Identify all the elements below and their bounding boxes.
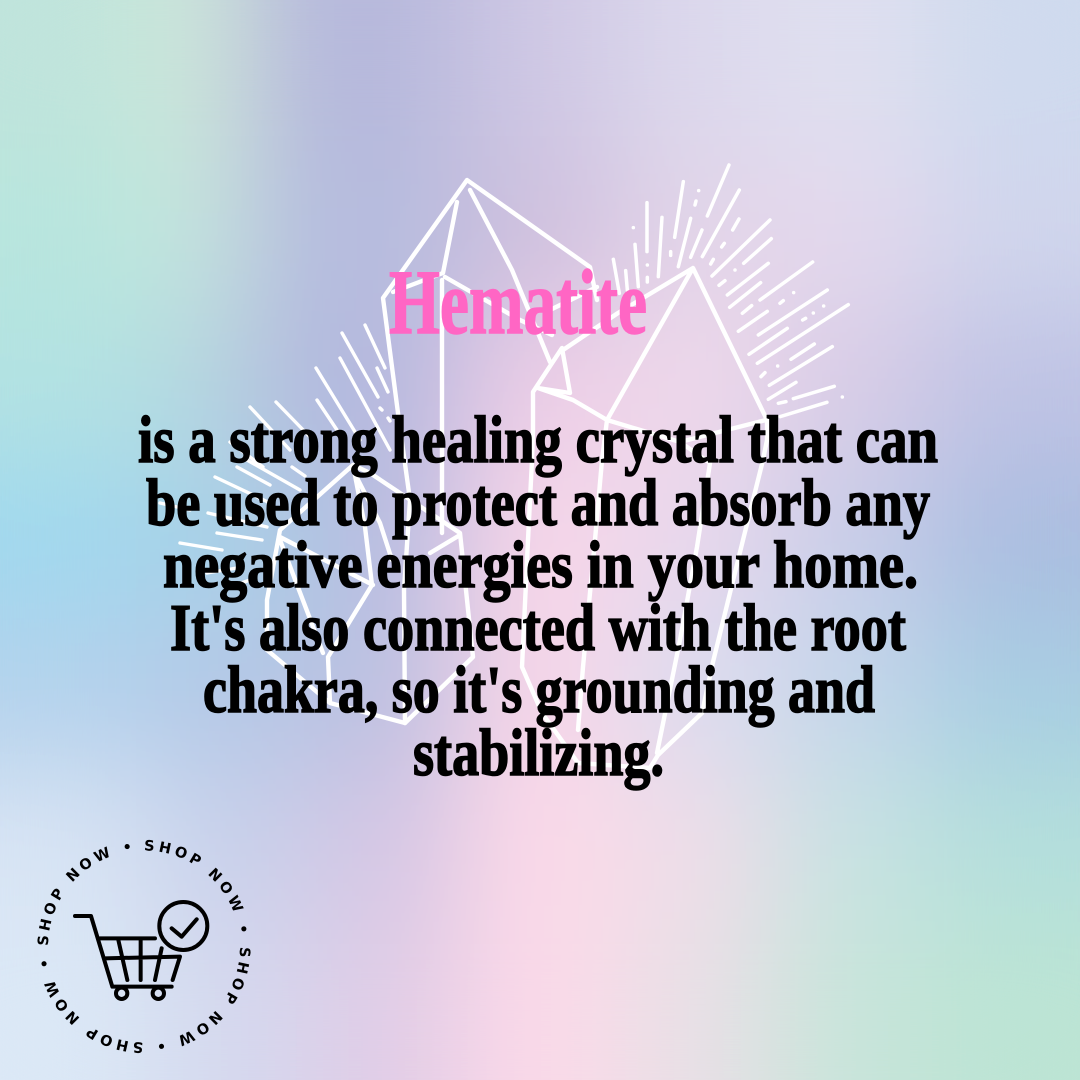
right crystal [522,268,767,768]
small lower-left crystal [267,465,473,723]
body text: stabilizing. [413,716,664,790]
body text: chakra, so it's grounding and [203,653,875,727]
title: Hematite [389,251,647,353]
right sunburst rays [613,165,848,417]
body text [138,403,938,790]
circular text: shop now: SHOP NOW • SHOP NOW • SHOP NOW • SHOP NOW • [37,840,251,1054]
left sunburst rays [160,325,390,587]
crystal cluster illustration [160,165,848,768]
icon: shopping cart with check mark [75,902,207,999]
body text: It's also connected with the root [170,591,907,665]
body text: negative energies in your home. [163,528,918,602]
shop now badge [37,840,251,1054]
large left crystal [383,180,597,723]
